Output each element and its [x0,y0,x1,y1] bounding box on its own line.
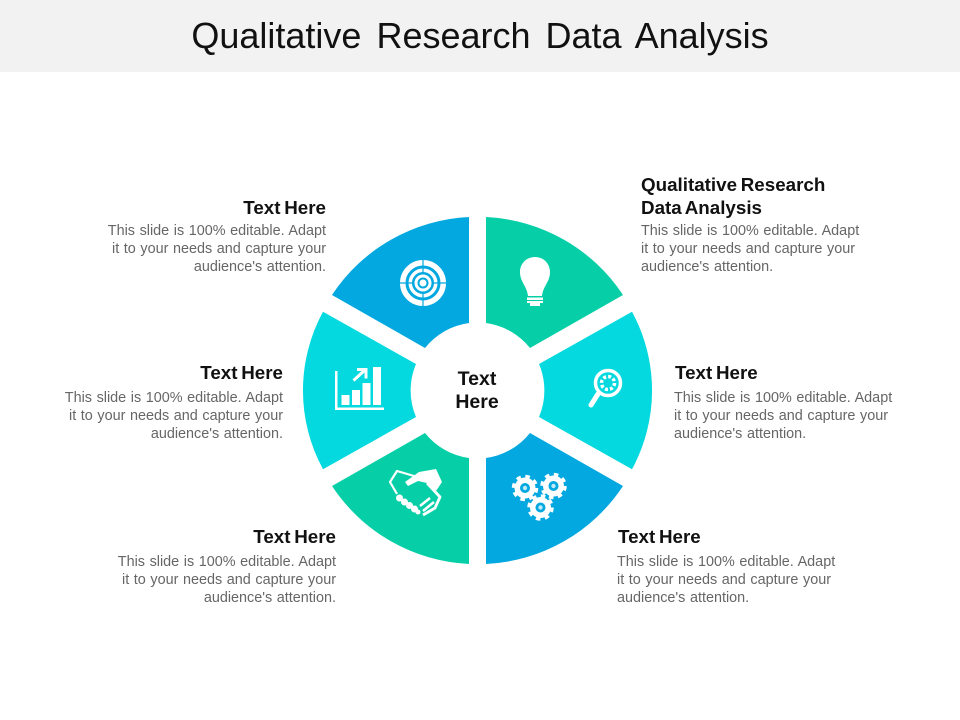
text block: middle left: it to your needs and capture your [69,408,283,424]
text block: middle right: it to your needs and capture your [674,408,888,424]
text block: middle left [65,362,283,442]
icon: handshake [390,469,442,515]
title bar [0,0,960,72]
segment: left [303,312,416,469]
text block: bottom right [617,526,836,606]
icon: target [400,260,446,306]
segment: bottom left [332,433,469,564]
text block: bottom left: Text Here [253,526,336,547]
center label [455,368,499,413]
icon: magnifier [591,370,620,405]
text block: top left: audience's attention. [194,259,326,275]
text block: top right: Qualitative Research [641,174,825,195]
text block: bottom right: audience's attention. [617,590,749,606]
text block: top left: it to your needs and capture your [112,241,326,257]
text block: bottom left [118,526,336,606]
text block: middle right: This slide is 100% editable. Adapt [674,390,892,406]
text block: top right: it to your needs and capture your [641,241,855,257]
center label: Text [458,368,496,390]
text block: top left: This slide is 100% editable. Adapt [108,223,326,239]
text block: middle right [674,362,892,442]
text block: middle left: Text Here [200,362,283,383]
text block: top left: Text Here [243,197,326,218]
text block: middle right: audience's attention. [674,426,806,442]
text block: bottom left: it to your needs and capture your [122,572,336,588]
segment: top right [486,217,623,348]
text block: top left [108,197,326,275]
center label: Here [455,391,499,413]
title: Qualitative Research Data Analysis [191,15,769,56]
text block: top right: audience's attention. [641,259,773,275]
text block: middle left: audience's attention. [151,426,283,442]
text block: bottom right: it to your needs and capture your [617,572,831,588]
icon: gears [514,474,565,519]
text block: middle right: Text Here [675,362,758,383]
icon: bar chart [335,367,384,410]
text block: bottom left: This slide is 100% editable. Adapt [118,554,336,570]
segment: top left [332,217,469,348]
segment: bottom right [486,433,623,564]
text block: middle left: This slide is 100% editable. Adapt [65,390,283,406]
text block: top right [641,174,860,275]
text block: bottom right: Text Here [618,526,701,547]
text block: top right: Data Analysis [641,197,762,218]
text block: top right: This slide is 100% editable. Adapt [641,223,859,239]
text block: bottom left: audience's attention. [204,590,336,606]
icon: light bulb [520,257,550,306]
segment: right [539,312,652,469]
text block: bottom right: This slide is 100% editable. Adapt [617,554,835,570]
